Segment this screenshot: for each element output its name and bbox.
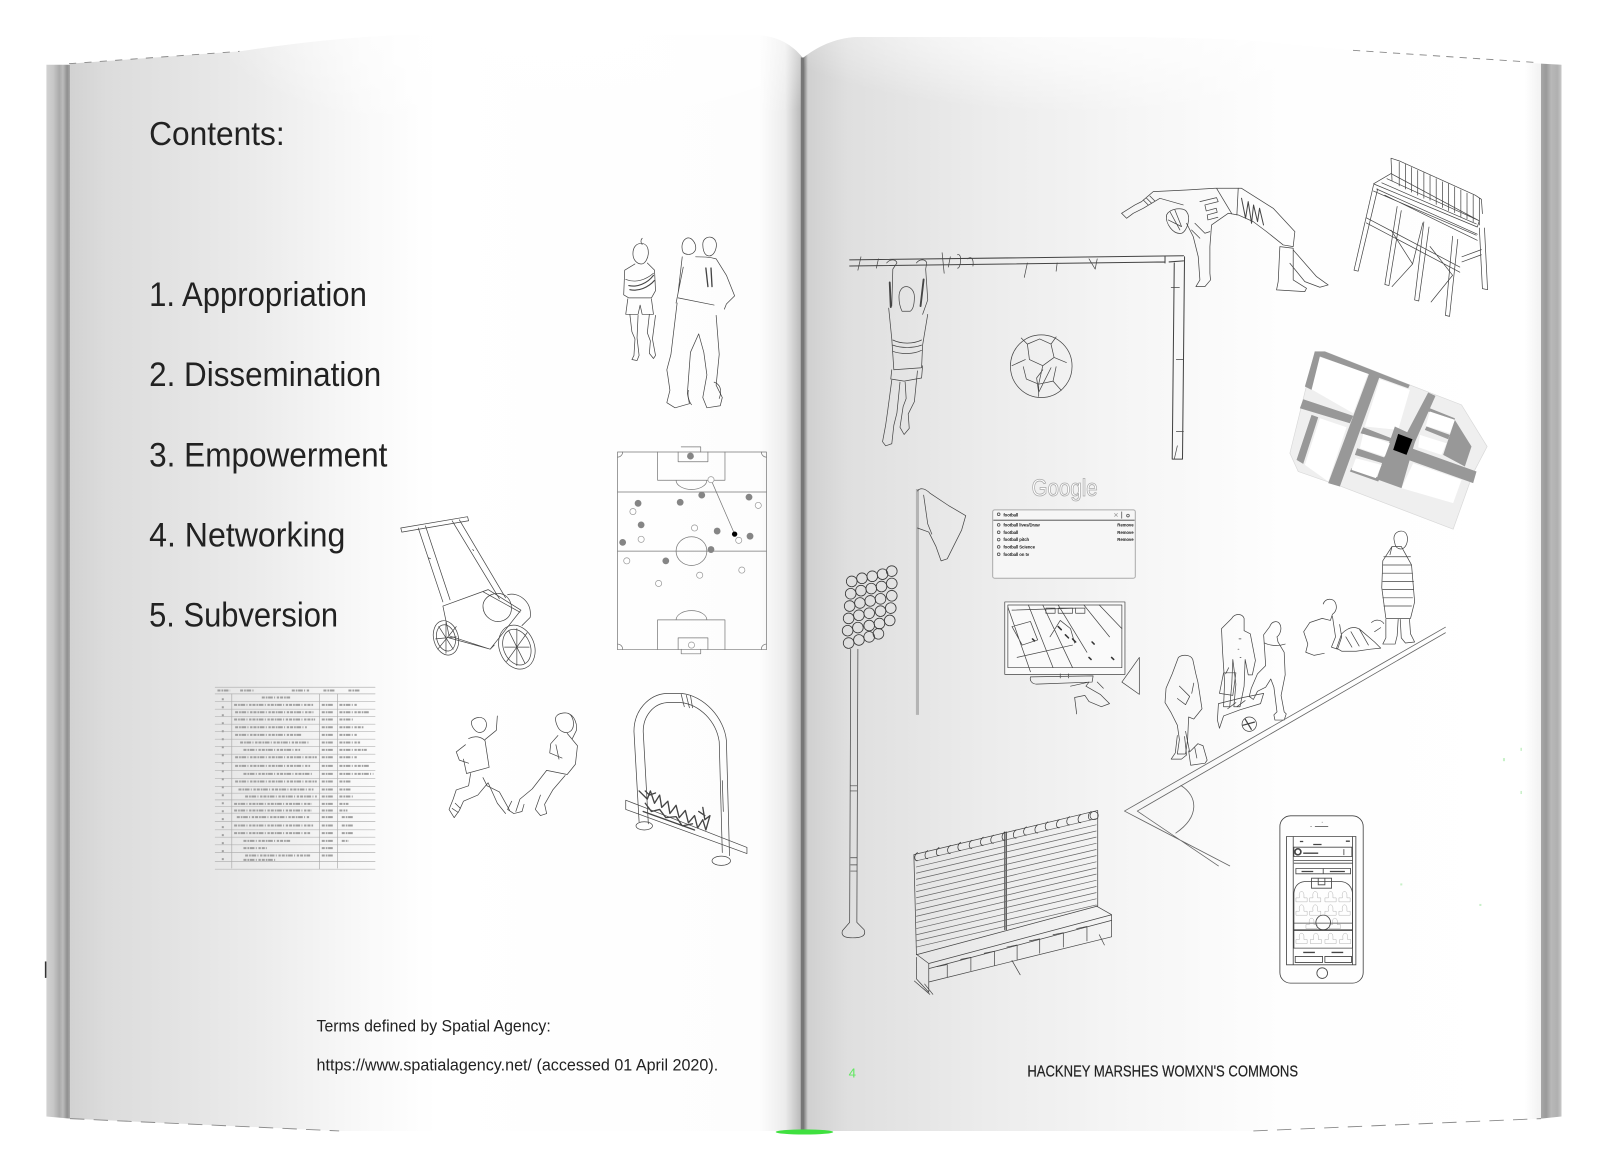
- icon: goalpost with sponsor board: [626, 693, 747, 865]
- icon: tv showing match with hand: [1005, 602, 1139, 714]
- google logo: Google: [1032, 475, 1098, 502]
- contents list: 5. Subversion: [149, 597, 338, 635]
- search dropdown: football on tv: [1003, 552, 1030, 557]
- handwritten fixtures table: [215, 687, 375, 869]
- search dropdown: football lives/Draw: [1003, 523, 1040, 528]
- icon: corner flag: [917, 489, 966, 715]
- contents list: 1. Appropriation: [149, 276, 367, 314]
- icon: football: [1010, 335, 1072, 398]
- phone buttons: [1295, 841, 1352, 962]
- contents list: 4. Networking: [149, 516, 345, 554]
- map parkland: [1290, 352, 1487, 529]
- icon: floodlight: [842, 566, 897, 938]
- person with shopping bag: [1217, 615, 1264, 728]
- left cover edge: [46, 65, 70, 1119]
- table handwriting: [217, 691, 373, 865]
- search dropdown: Remove: [1117, 523, 1134, 528]
- right page surface: [803, 37, 1541, 1131]
- corner pitch lines: [1124, 627, 1445, 866]
- icon: phone with team line-up app: [1280, 816, 1363, 983]
- search dropdown: football pitch: [1003, 537, 1030, 542]
- contents list: 2. Dissemination: [149, 356, 381, 394]
- group of players kitting up: [1165, 531, 1415, 765]
- icon: two players tackling: [449, 713, 577, 818]
- heading: contents: Contents:: [149, 115, 285, 152]
- map courts: [1352, 412, 1455, 478]
- football on ground: [1242, 717, 1256, 731]
- search dropdown: football: [1003, 530, 1018, 535]
- left edge tick: [45, 961, 46, 978]
- person standing in puffer jacket: [1382, 531, 1415, 644]
- search dropdown: Remove: [1117, 530, 1134, 535]
- green specks: [1400, 748, 1522, 906]
- contents list: 3. Empowerment: [149, 436, 388, 474]
- search box: [993, 475, 1135, 578]
- footer title: HACKNEY MARSHES WOMXN'S COMMONS: [1027, 1063, 1298, 1080]
- footnote: [317, 1016, 718, 1074]
- left page surface: [70, 35, 802, 1131]
- green ribbon at spine: [776, 1129, 833, 1135]
- site plan map: [1290, 352, 1487, 529]
- crouching person with kit: [1304, 599, 1384, 655]
- person with hood and backpack: [1165, 655, 1207, 765]
- map paths: [1297, 352, 1476, 488]
- icon: line marking machine: [401, 517, 542, 675]
- contents list: [149, 276, 388, 635]
- map central marker: [1393, 434, 1413, 455]
- person with raised foot: [1249, 622, 1286, 720]
- footnote: Terms defined by Spatial Agency:: [317, 1016, 551, 1035]
- icon: football goal with hanging player: [850, 253, 1185, 459]
- search dropdown: football: [1003, 512, 1018, 517]
- search dropdown: [993, 510, 1135, 578]
- search dropdown: football Science: [1003, 545, 1036, 550]
- icon: spectator stand: [1354, 158, 1488, 316]
- panel: left book page: [46, 35, 802, 1131]
- pitch tactical diagram: [618, 447, 766, 654]
- icon: changing room bench: [914, 810, 1112, 994]
- map fields: [1305, 357, 1461, 503]
- page number: 4: [849, 1066, 857, 1081]
- spine shadow: [801, 58, 804, 1131]
- search dropdown: Remove: [1117, 537, 1134, 542]
- icon: stretching player: [1122, 188, 1328, 292]
- phone line-up players: [1296, 891, 1351, 944]
- icon: three players talking: [624, 237, 735, 408]
- right cover edge: [1541, 64, 1562, 1119]
- footnote: https://www.spatialagency.net/ (accessed 01 April 2020).: [317, 1055, 718, 1074]
- top highlight: [70, 35, 802, 205]
- panel: right book page: [803, 37, 1562, 1131]
- top highlight: [803, 37, 1541, 205]
